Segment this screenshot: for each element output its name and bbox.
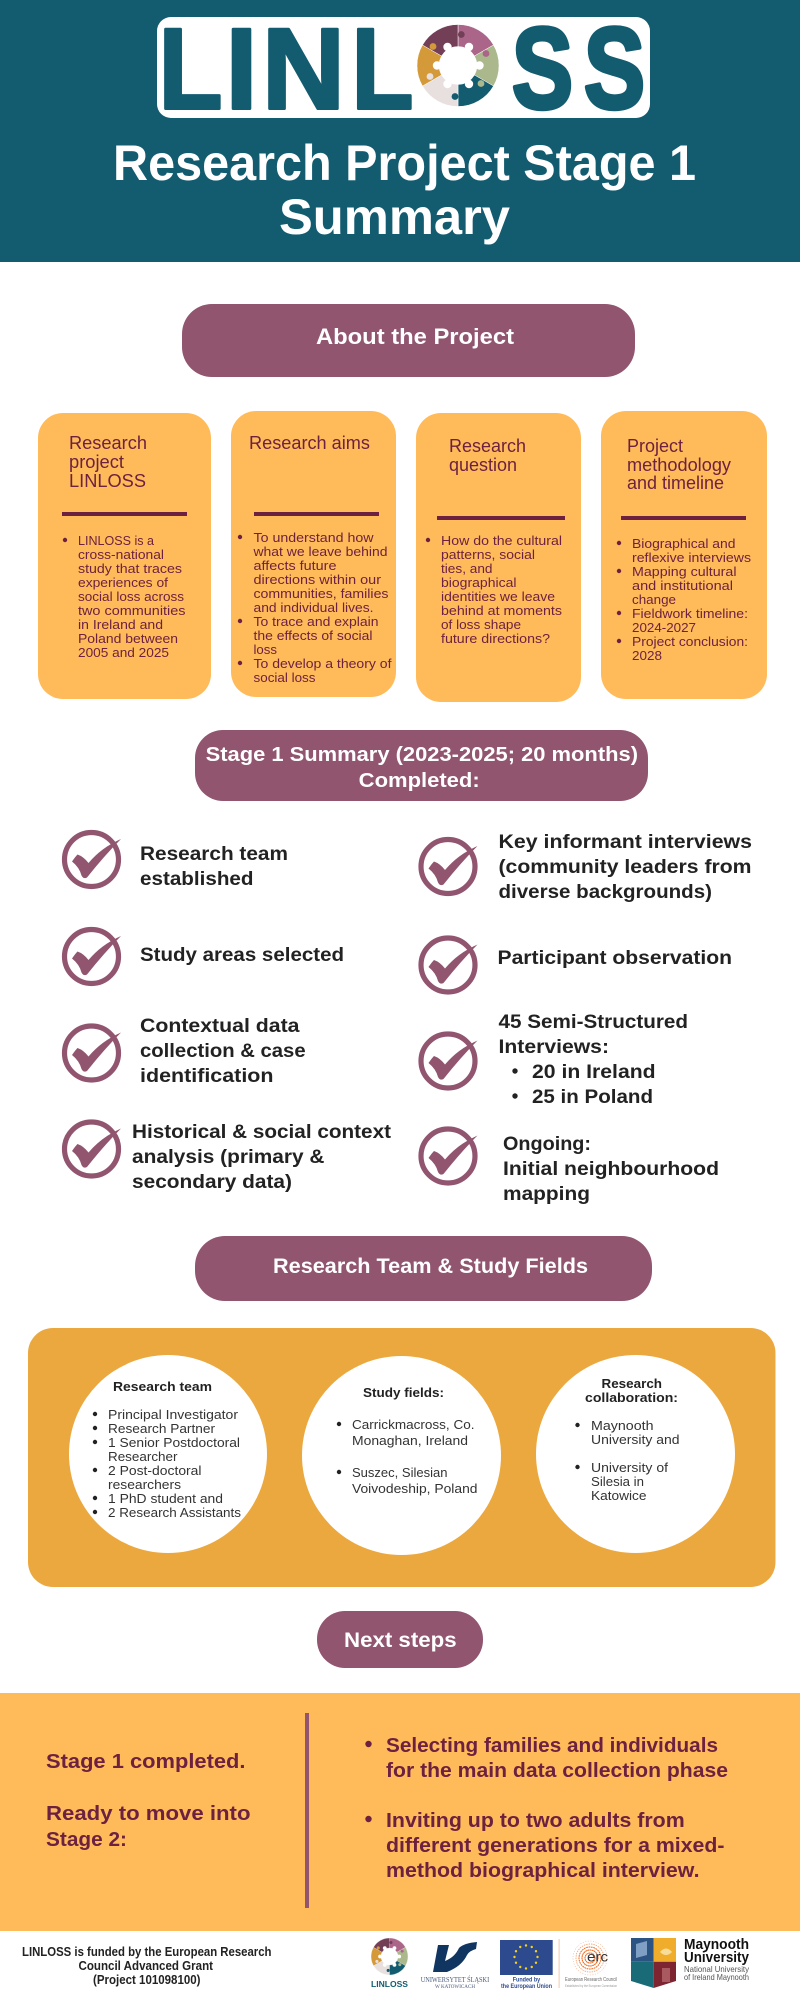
funding statement: LINLOSS is funded by the European Research — [22, 1945, 272, 1959]
next step bullets: method biographical interview. — [386, 1860, 700, 1882]
checklist item: semi-structured interviews: 25 in Poland — [532, 1087, 653, 1108]
heading: Research Team and Study Fields: Research Team & Study Fields — [273, 1254, 588, 1278]
card text: affects future — [254, 558, 336, 573]
card text: cross-national — [78, 547, 164, 562]
card text: change — [632, 592, 676, 607]
panel: research aims — [231, 411, 396, 697]
card text: social loss across — [78, 589, 185, 604]
LINLOSS logo: N — [262, 6, 345, 134]
circle: research team: Researcher — [108, 1450, 178, 1464]
card text: 2005 and 2025 — [78, 645, 169, 660]
panel: research project LINLOSS — [38, 413, 211, 699]
logo: University of Silesia: W KATOWICACH — [435, 1985, 475, 1990]
LINLOSS logo: I — [226, 6, 258, 134]
card heading — [69, 432, 147, 491]
checklist item: historical context: Historical & social context — [132, 1122, 392, 1143]
funding statement: (Project 101098100) — [93, 1973, 200, 1987]
card text: patterns, social — [441, 547, 535, 562]
checklist item: historical context — [64, 1122, 392, 1193]
card text: To develop a theory of — [254, 656, 392, 671]
card text: Poland between — [78, 631, 178, 646]
circle: research team: 2 Research Assistants — [108, 1506, 241, 1520]
card heading: Research — [69, 432, 147, 453]
stage status text — [46, 1751, 250, 1851]
heading: About the Project: About the Project — [316, 324, 515, 349]
card text: How do the cultural — [441, 533, 562, 548]
card text: in Ireland and — [78, 617, 163, 632]
card text: 2024-2027 — [632, 620, 696, 635]
heading: About the Project — [182, 304, 635, 377]
checklist item: study areas: Study areas selected — [140, 945, 344, 966]
stage status text: Stage 1 completed. — [46, 1751, 246, 1773]
circle: research collaboration: collaboration: — [585, 1390, 678, 1405]
card heading: Research aims — [249, 432, 370, 453]
card text: communities, families — [254, 586, 389, 601]
card heading: methodology — [627, 454, 732, 475]
checklist item: research team — [64, 832, 288, 890]
card text: To trace and explain — [254, 614, 378, 629]
card text: behind at moments — [441, 603, 563, 618]
checklist item: key informants: Key informant interviews — [498, 832, 752, 853]
next step bullets — [365, 1735, 728, 1882]
heading: Next steps — [317, 1611, 483, 1668]
checklist item: key informants: diverse backgrounds) — [498, 882, 712, 903]
funding statement — [22, 1945, 272, 1987]
checklist item: key informants — [421, 832, 752, 903]
card text: identities we leave — [441, 589, 555, 604]
card text: and individual lives. — [254, 600, 374, 615]
circle: research team: 1 PhD student and — [108, 1492, 223, 1506]
LINLOSS logo — [157, 5, 650, 134]
heading: Stage 1 Summary — [195, 730, 648, 801]
checklist item: ongoing mapping: Initial neighbourhood — [503, 1159, 719, 1180]
card heading: project — [69, 451, 124, 472]
circle: research team: Principal Investigator — [108, 1408, 238, 1422]
logo: ERC: erc — [587, 1948, 608, 1964]
checklist item: historical context: secondary data) — [132, 1172, 292, 1193]
card text: future directions? — [441, 631, 550, 646]
circle: study fields: Voivodeship, Poland — [352, 1482, 478, 1496]
circle: study fields: Monaghan, Ireland — [352, 1434, 468, 1448]
checklist item: participant observation — [421, 938, 732, 992]
checklist item: research team: established — [140, 869, 254, 890]
LINLOSS logo: S — [584, 5, 645, 133]
funding statement: Council Advanced Grant — [78, 1959, 214, 1973]
circle: research collaboration: Maynooth — [591, 1419, 654, 1433]
card text — [617, 536, 752, 663]
heading: Stage 1 Summary: Completed: — [359, 770, 480, 792]
panel: methodology and timeline — [601, 411, 767, 699]
circle: research team: 2 Post-doctoral — [108, 1464, 202, 1478]
card text: what we leave behind — [252, 544, 388, 559]
logo: LINLOSS small — [371, 1938, 409, 1989]
panel: research question — [416, 413, 581, 702]
circle: research collaboration: University of — [591, 1461, 669, 1475]
heading: Research Team and Study Fields — [195, 1236, 652, 1301]
circle: study fields: Study fields: — [363, 1385, 444, 1400]
checklist item: semi-structured interviews — [421, 1012, 688, 1108]
card text: directions within our — [254, 572, 382, 587]
card text: experiences of — [78, 575, 168, 590]
checklist item: study areas — [64, 930, 344, 984]
card heading — [627, 435, 732, 493]
logo: Maynooth University: National University — [684, 1964, 750, 1974]
header banner — [0, 0, 800, 262]
circle: study fields: Suszec, Silesian — [352, 1466, 448, 1480]
card text: social loss — [254, 670, 316, 685]
circle: research team: Research team — [113, 1379, 212, 1394]
card text: the effects of social — [254, 628, 373, 643]
circle: research collaboration — [536, 1355, 735, 1553]
checklist item: ongoing mapping: mapping — [503, 1184, 590, 1205]
card text: 2028 — [632, 648, 662, 663]
card text: Mapping cultural — [632, 564, 737, 579]
card heading: question — [449, 454, 517, 475]
circle: research collaboration: Research — [602, 1376, 662, 1391]
logo: Maynooth University: of Ireland Maynooth — [684, 1972, 749, 1982]
next step bullets: for the main data collection phase — [386, 1760, 728, 1782]
checklist item: semi-structured interviews: 45 Semi-Structured — [498, 1012, 688, 1033]
card text: Fieldwork timeline: — [632, 606, 748, 621]
LINLOSS logo: S — [512, 5, 573, 133]
logo: ERC: Established by the European Commission — [565, 1984, 617, 1988]
logo: University of Silesia — [421, 1942, 490, 1990]
circle: study fields — [302, 1356, 501, 1555]
checklist item: semi-structured interviews: 20 in Ireland — [532, 1062, 656, 1083]
checklist item: participant observation: Participant observation — [498, 948, 732, 969]
card text — [426, 533, 563, 646]
logo: EU flag — [500, 1940, 553, 1990]
title: Research Project Stage 1 — [113, 135, 696, 191]
checklist item: contextual data: Contextual data — [140, 1016, 300, 1037]
card text: loss — [254, 642, 278, 657]
card text: reflexive interviews — [632, 550, 752, 565]
checklist item: contextual data — [64, 1016, 306, 1087]
card text: To understand how — [254, 530, 374, 545]
stage status text: Stage 2: — [46, 1829, 127, 1851]
card text — [238, 530, 392, 685]
card heading — [449, 435, 526, 475]
card text: study that traces — [78, 561, 183, 576]
card heading: LINLOSS — [69, 470, 146, 491]
card heading: and timeline — [627, 472, 724, 493]
heading: Next steps: Next steps — [344, 1628, 457, 1652]
card text: Project conclusion: — [632, 634, 748, 649]
next step bullets: different generations for a mixed- — [386, 1835, 724, 1857]
card text: two communities — [78, 603, 186, 618]
panel: next steps band — [0, 1693, 800, 1931]
panel: team and fields — [28, 1328, 776, 1587]
logo: ERC — [565, 1941, 617, 1988]
circle: research team — [69, 1355, 267, 1553]
checklist item: research team: Research team — [140, 844, 288, 865]
circle: research team: researchers — [108, 1478, 181, 1492]
heading: Stage 1 Summary: Stage 1 Summary (2023-2025; 20 months) — [206, 744, 638, 766]
logo: Maynooth University — [631, 1936, 750, 1988]
card text: of loss shape — [441, 617, 521, 632]
circle: study fields: Carrickmacross, Co. — [352, 1418, 474, 1432]
card text: ties, and — [441, 561, 492, 576]
card heading: Research — [449, 435, 526, 456]
circle: research team: 1 Senior Postdoctoral — [108, 1436, 240, 1450]
checklist item: contextual data: collection & case — [140, 1041, 306, 1062]
card text: Biographical and — [632, 536, 736, 551]
title: Summary — [279, 189, 510, 245]
checklist item: contextual data: identification — [140, 1066, 274, 1087]
card text: and institutional — [632, 578, 733, 593]
checklist item: semi-structured interviews: Interviews: — [498, 1037, 609, 1058]
checklist item: ongoing mapping — [421, 1129, 719, 1205]
card text: LINLOSS is a — [78, 533, 155, 548]
logo: University of Silesia: UNIWERSYTET ŚLĄSKI — [421, 1974, 490, 1984]
circle: research collaboration: University and — [591, 1433, 680, 1447]
stage status text: Ready to move into — [46, 1803, 250, 1825]
LINLOSS logo: L — [158, 6, 222, 134]
circle: research collaboration: Katowice — [591, 1489, 646, 1503]
logo: EU flag: the European Union — [501, 1983, 552, 1990]
circle: research collaboration: Silesia in — [591, 1475, 644, 1489]
LINLOSS logo: L — [352, 6, 414, 134]
card text — [63, 533, 186, 660]
checklist item: key informants: (community leaders from — [498, 857, 752, 878]
checklist item: historical context: analysis (primary & — [132, 1147, 325, 1168]
circle: research team: Research Partner — [108, 1422, 215, 1436]
logo: EU flag: Funded by — [513, 1976, 541, 1984]
logo: ERC: European Research Council — [565, 1977, 617, 1983]
checklist item: ongoing mapping: Ongoing: — [503, 1134, 591, 1155]
title — [113, 135, 696, 245]
logo: Maynooth University: University — [684, 1949, 750, 1966]
logo: Maynooth University: Maynooth — [684, 1936, 749, 1953]
logo: LINLOSS small: LINLOSS — [371, 1980, 409, 1989]
card text: biographical — [441, 575, 517, 590]
next step bullets: Inviting up to two adults from — [386, 1810, 685, 1832]
next step bullets: Selecting families and individuals — [386, 1735, 718, 1757]
card heading: Project — [627, 435, 683, 456]
